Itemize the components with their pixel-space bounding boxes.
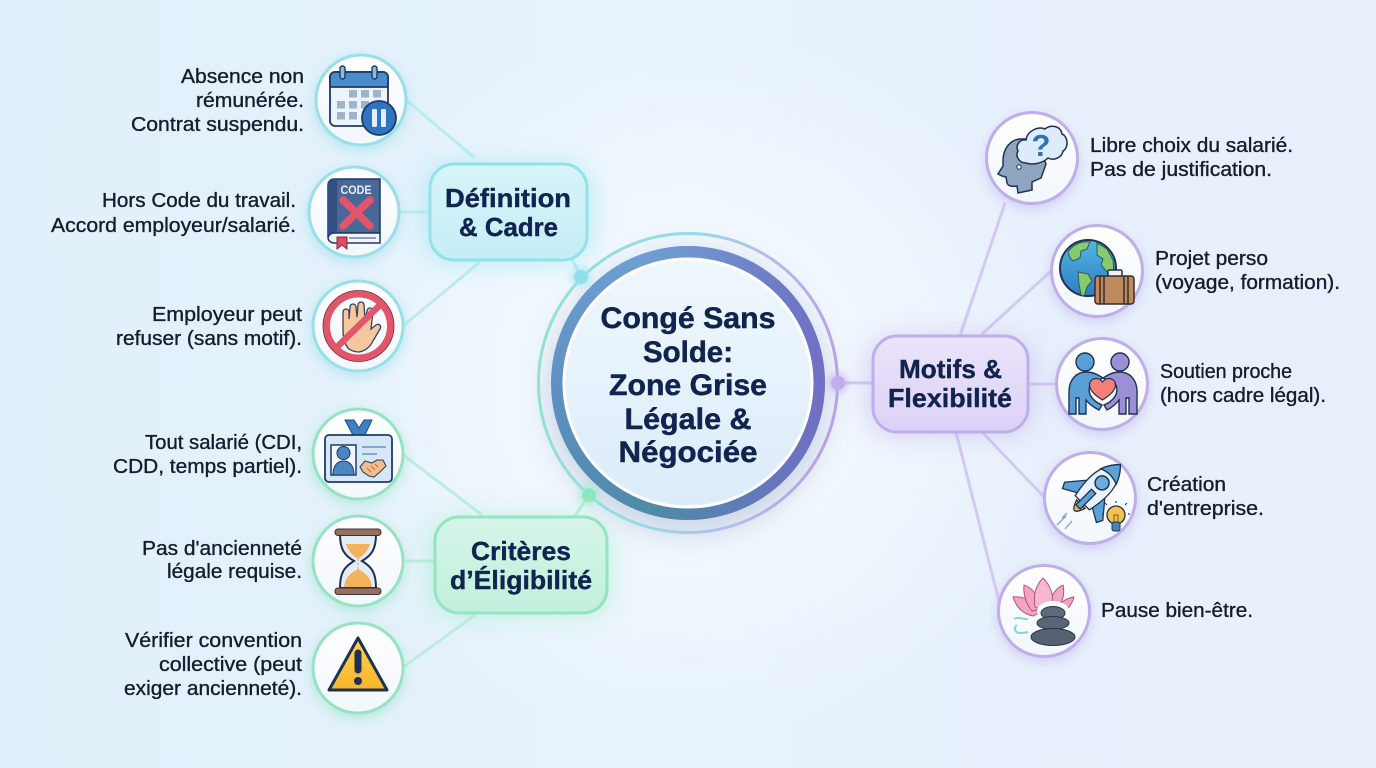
title: Congé Sans <box>600 302 776 335</box>
heading box: Définition & Cadre: & Cadre <box>459 212 558 242</box>
text: employeur: Employeur peut <box>152 304 302 326</box>
text: convention: Vérifier convention <box>125 630 302 652</box>
heading box: Motifs & Flexibilité: Motifs & <box>899 354 1002 384</box>
text: employeur: refuser (sans motif). <box>116 328 302 350</box>
text: convention <box>124 630 302 700</box>
title: Zone Grise <box>609 369 767 402</box>
junction dot: définition <box>570 266 592 288</box>
heading box: Motifs & Flexibilité <box>868 336 1032 434</box>
panel: absence non rémunérée <box>131 55 408 151</box>
icon: head with question cloud <box>998 126 1067 193</box>
text: soutien proche: (hors cadre légal). <box>1160 385 1326 407</box>
text: libre choix <box>1090 135 1293 181</box>
text: libre choix: Libre choix du salarié. <box>1090 135 1293 157</box>
heading box: Critères d'Éligibilité: d’Éligibilité <box>450 565 592 595</box>
text: ancienneté <box>142 538 302 583</box>
central circle: Congé Sans Solde <box>538 234 838 534</box>
panel: projet perso <box>1050 226 1340 322</box>
icon: two people with heart <box>1069 353 1137 414</box>
panel: employeur peut refuser <box>116 281 405 377</box>
panel: tout salarié <box>113 409 405 505</box>
panel: vérifier convention <box>124 623 405 719</box>
connectors: définition branch <box>398 100 581 326</box>
text: création <box>1147 474 1264 520</box>
text: hors code <box>51 190 296 237</box>
panel: hors code du travail <box>51 167 401 263</box>
heading box: Définition & Cadre: Définition <box>445 183 571 213</box>
connectors: critères branch <box>402 454 589 668</box>
connectors: motifs branch <box>838 203 1057 605</box>
panel: soutien proche <box>1055 338 1326 435</box>
text: absence: rémunérée. <box>196 90 304 112</box>
text: ancienneté: Pas d'ancienneté <box>142 538 302 560</box>
text: absence <box>131 66 304 136</box>
text: absence: Contrat suspendu. <box>131 114 304 136</box>
icon: warning triangle <box>329 638 387 690</box>
title: Légale & <box>624 403 752 436</box>
text: tout salarié <box>113 432 302 478</box>
text: projet perso <box>1155 248 1340 294</box>
icon: lotus and stones <box>1013 578 1075 646</box>
text: hors code: Accord employeur/salarié. <box>51 215 296 237</box>
text: convention: collective (peut <box>159 654 302 676</box>
junction dot: critères <box>578 484 600 506</box>
icon: globe and suitcase <box>1060 240 1134 304</box>
icon: rocket and light bulb <box>1055 445 1140 531</box>
text: création: Création <box>1147 474 1226 496</box>
text: hors code: Hors Code du travail. <box>102 190 296 212</box>
heading box: Motifs & Flexibilité: Flexibilité <box>888 383 1012 413</box>
panel: pause bien-être <box>997 566 1253 662</box>
panel: pas d'ancienneté <box>142 516 405 612</box>
text: projet perso: (voyage, formation). <box>1155 272 1340 294</box>
icon: calendar with pause <box>330 66 396 135</box>
text: pause: Pause bien-être. <box>1101 600 1253 622</box>
text: soutien proche <box>1160 361 1326 407</box>
heading box: Définition & Cadre <box>425 164 591 261</box>
title <box>600 302 776 469</box>
icon: head with question cloud: ? <box>1032 128 1050 163</box>
panel: création d'entreprise <box>1043 445 1264 549</box>
text: convention: exiger ancienneté). <box>124 678 302 700</box>
text: ancienneté: légale requise. <box>167 561 302 583</box>
text: absence: Absence non <box>181 66 304 88</box>
text: projet perso: Projet perso <box>1155 248 1268 270</box>
icon: prohibited hand <box>323 290 394 362</box>
text: tout salarié: CDD, temps partiel). <box>113 456 302 478</box>
icon: id badge with handshake <box>325 420 392 482</box>
text: création: d'entreprise. <box>1147 498 1264 520</box>
title: Solde: <box>643 336 733 369</box>
heading box: Critères d'Éligibilité: Critères <box>471 536 571 566</box>
heading box: Critères d'Éligibilité <box>430 517 610 615</box>
text: libre choix: Pas de justification. <box>1090 159 1272 181</box>
panel: libre choix <box>985 112 1293 209</box>
text: tout salarié: Tout salarié (CDI, <box>145 432 302 454</box>
junction dot: motifs <box>827 372 849 394</box>
icon: hourglass <box>335 529 381 594</box>
icon: code book with cross <box>328 179 380 249</box>
title: Négociée <box>618 436 758 469</box>
text: soutien proche: Soutien proche <box>1160 361 1292 383</box>
text: employeur <box>116 304 302 350</box>
icon: code book with cross: CODE <box>340 183 372 197</box>
